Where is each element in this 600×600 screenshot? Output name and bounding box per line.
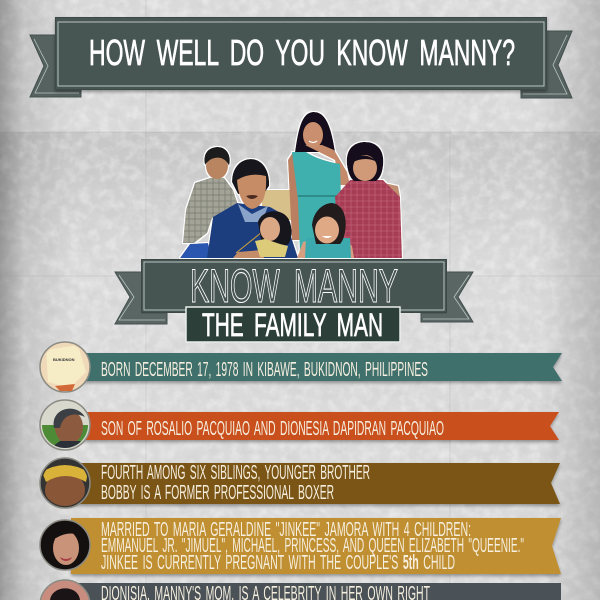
icon: portrait of brother — [40, 458, 90, 508]
sub-heading plate — [186, 307, 400, 342]
fact 5: mother — [40, 580, 561, 600]
ribbon — [60, 353, 562, 381]
heading: KNOW MANNY — [190, 259, 398, 312]
fact 3: siblings — [40, 458, 560, 508]
icon: map of Bukidnon — [40, 342, 90, 392]
left ribbon tail — [30, 35, 81, 97]
boy on left — [180, 147, 238, 258]
ribbon — [60, 583, 561, 600]
fact 1: birth — [40, 342, 562, 392]
text: BOBBY IS A FORMER PROFESSIONAL BOXER — [101, 482, 334, 504]
right ribbon tail — [521, 31, 572, 98]
sub-heading: THE FAMILY MAN — [202, 307, 383, 343]
ribbon — [71, 518, 561, 574]
family photo cutout — [180, 112, 402, 258]
text — [101, 462, 370, 504]
icon: portrait of Jinkee — [40, 520, 90, 570]
ribbon — [60, 412, 559, 440]
woman — [288, 112, 350, 255]
ribbon — [60, 463, 560, 504]
girl — [297, 203, 354, 258]
section banner: Know Manny — [115, 259, 473, 343]
main title plate — [56, 18, 546, 90]
baby on lap — [233, 211, 292, 258]
fact 2: parents — [40, 400, 559, 450]
text — [101, 519, 524, 574]
chair — [262, 190, 292, 220]
main plate — [142, 260, 446, 312]
icon: map of Bukidnon: BUKIDNON — [53, 357, 75, 362]
icon: portrait of father — [40, 400, 90, 450]
top title banner — [30, 18, 572, 98]
icon: portrait of Dionisia — [40, 580, 90, 600]
left ribbon tail — [115, 272, 167, 324]
Manny — [207, 159, 298, 258]
right ribbon tail — [421, 272, 473, 322]
fact 4: marriage — [40, 518, 561, 574]
boy on right — [335, 142, 402, 258]
